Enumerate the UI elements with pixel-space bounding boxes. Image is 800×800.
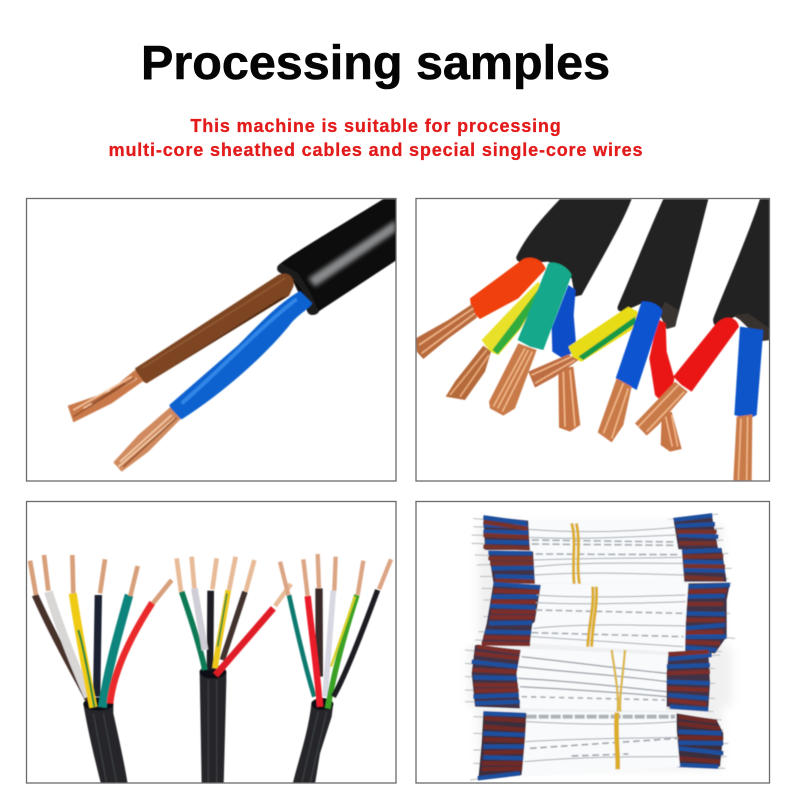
yellow-green core, cable 2 bbox=[528, 307, 638, 388]
cable 3 sheath bbox=[713, 199, 770, 341]
red core, cable 3 bbox=[635, 318, 739, 436]
blue wire bbox=[169, 291, 312, 419]
bundle 4 bbox=[470, 712, 728, 780]
cable 2 sheath bbox=[618, 199, 708, 329]
blue wire copper end bbox=[113, 407, 181, 472]
brown wire bbox=[135, 273, 294, 383]
brown wire copper end bbox=[68, 370, 143, 422]
middle cable, six cores bbox=[177, 557, 291, 784]
panel frames bbox=[26, 198, 770, 783]
green core bbox=[489, 262, 572, 416]
subtitle bbox=[109, 116, 643, 160]
panel: bundled pre-cut wires bbox=[464, 512, 736, 782]
cable 1 sheath bbox=[516, 199, 632, 297]
sample photo panels bbox=[26, 198, 770, 784]
blue core, back bbox=[552, 285, 580, 432]
bundle 1 bbox=[472, 514, 732, 585]
black sheath bbox=[277, 199, 397, 315]
right cable, six cores bbox=[280, 554, 391, 784]
bundle 3 bbox=[465, 645, 720, 712]
blue core, cable 2 bbox=[598, 301, 662, 442]
orange-red core bbox=[416, 258, 546, 359]
blue core, cable 3 bbox=[733, 327, 763, 481]
subtitle: This machine is suitable for processing bbox=[190, 116, 562, 136]
bundle 2 bbox=[475, 583, 735, 653]
subtitle: multi-core sheathed cables and special single-core wires bbox=[109, 140, 643, 160]
yellow-green core bbox=[446, 282, 543, 400]
panel: two-core sheathed cable bbox=[67, 199, 396, 472]
title: Processing samples bbox=[141, 36, 610, 90]
panel: multi-core control cables bbox=[27, 553, 394, 782]
red core, back bbox=[649, 319, 682, 452]
soft shadow bbox=[468, 523, 732, 770]
panel: rubber cables with coloured cores bbox=[416, 199, 770, 481]
left cable, six cores bbox=[30, 555, 172, 784]
